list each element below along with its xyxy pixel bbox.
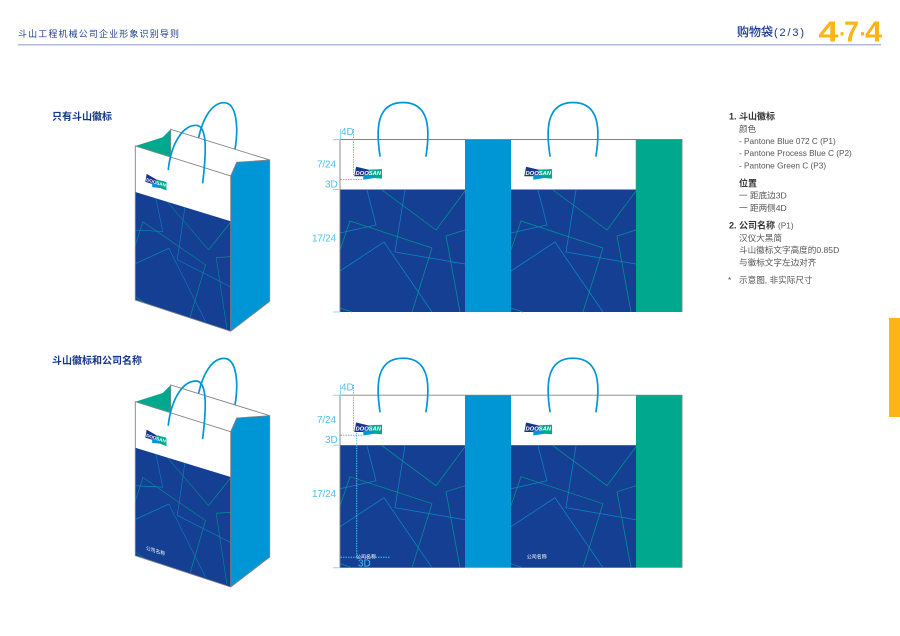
bag 3D view: logo only (135, 103, 270, 331)
dimension annotations: logo only: 4D (341, 127, 354, 138)
notes: specification text: * (728, 275, 732, 285)
bag flat view: logo and company name (340, 358, 682, 568)
header: section number: . (839, 16, 845, 40)
header: section title: (2/3) (774, 27, 804, 39)
header: section number: . (860, 16, 866, 40)
header: section title (737, 24, 804, 39)
header: section number (818, 16, 882, 49)
notes: specification text: 示意图, 非实际尺寸 (739, 274, 813, 285)
dimension annotations: logo and company name: 4D (341, 383, 354, 394)
header: section number: 4 (818, 17, 838, 49)
yellow side tab (889, 318, 900, 417)
heading: logo and company name: 斗山徽标和公司名称 (52, 354, 142, 367)
notes: specification text: 一 距底边3D (739, 190, 787, 200)
bag flat view: logo and company name: 公司名称 (527, 554, 547, 561)
notes: specification text: 斗山徽标文字高度的0.85D (739, 244, 839, 255)
header: section number: 4 (865, 17, 882, 49)
notes: specification text: 颜色 (739, 123, 757, 134)
notes: specification text: - Pantone Blue 072 C (P1) (739, 137, 836, 146)
header rule (18, 44, 881, 46)
notes: specification text: 公司名称 (739, 220, 775, 230)
dimension annotations: logo only: 3D (325, 180, 338, 190)
notes: specification text (728, 110, 852, 285)
dimension annotations: logo and company name: 3D (325, 435, 338, 446)
bag 3D view: logo and company name: 公司名称 (146, 545, 165, 557)
notes: specification text: 与徽标文字左边对齐 (739, 256, 817, 268)
dimension annotations: logo and company name: 3D (358, 559, 371, 570)
dimension annotations: logo and company name (312, 383, 390, 570)
notes: specification text: 2. (729, 220, 737, 230)
notes: specification text: 斗山徽标 (739, 110, 775, 122)
notes: specification text: 位置 (739, 178, 757, 188)
heading: logo only: 只有斗山徽标 (52, 110, 112, 123)
header: section title: 购物袋 (737, 24, 773, 39)
notes: specification text: 汉仪大黑简 (739, 232, 782, 243)
header: section number: 7 (844, 17, 859, 49)
notes: specification text: 一 距两侧4D (739, 202, 787, 213)
header: document title: 斗山工程机械公司企业形象识别导则 (18, 28, 180, 39)
notes: specification text: (P1) (778, 222, 794, 230)
notes: specification text: 1. (729, 112, 737, 122)
bag flat view: logo and company name: 公司名称 (356, 554, 376, 561)
dimension annotations: logo only: 17/24 (312, 234, 336, 244)
dimension annotations: logo only: 7/24 (317, 160, 336, 170)
bag flat view: logo only (340, 102, 682, 312)
dimension annotations: logo and company name: 17/24 (312, 489, 336, 500)
notes: specification text: - Pantone Process Blue C (P2) (739, 149, 852, 158)
notes: specification text: - Pantone Green C (P3) (739, 162, 826, 170)
dimension annotations: logo and company name: 7/24 (317, 415, 336, 426)
bag 3D view: logo and company name (135, 358, 270, 587)
dimension annotations: logo only (312, 127, 363, 312)
